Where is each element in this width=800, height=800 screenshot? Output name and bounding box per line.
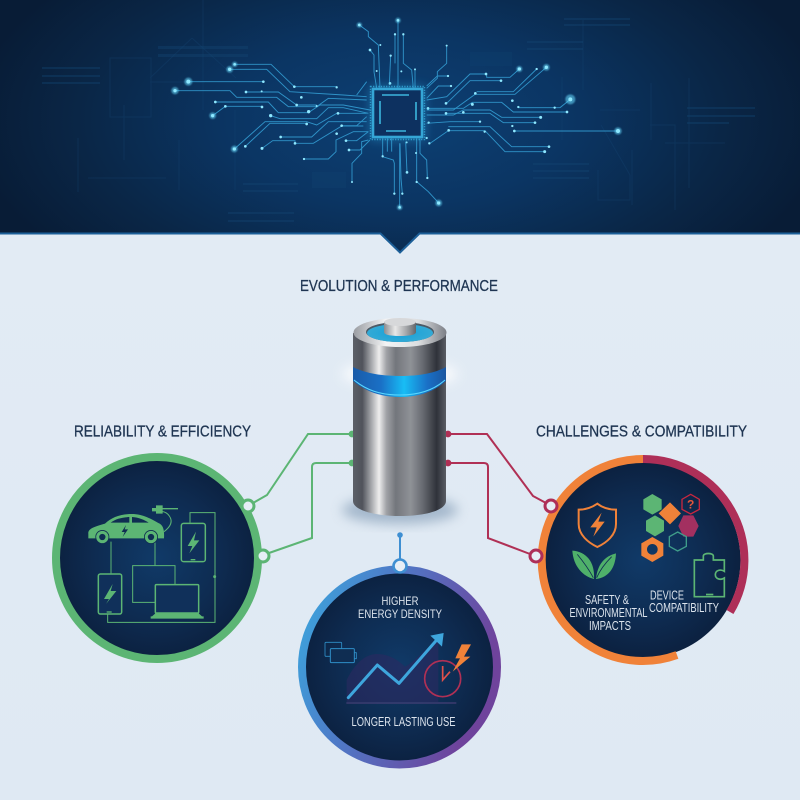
laptop (155, 585, 199, 613)
label: higher energy density: ENERGY DENSITY (358, 607, 442, 621)
car (88, 514, 164, 538)
top connector stem and node (394, 532, 406, 572)
header panel: circuit banner (0, 0, 800, 253)
orange ring arc (542, 459, 677, 661)
circuit traces (171, 18, 622, 210)
label: higher energy density: HIGHER (382, 594, 419, 608)
battery top cap (354, 318, 446, 347)
upper phone (181, 523, 205, 562)
label: device compatibility: DEVICE (650, 588, 684, 602)
glowing blue band (353, 367, 446, 397)
label: longer lasting use: LONGER LASTING USE (352, 715, 456, 729)
heading: challenges and compatibility: CHALLENGES & COMPATIBILITY (536, 424, 747, 440)
label: safety and environmental impacts: SAFETY & (585, 593, 629, 607)
battery (342, 318, 458, 524)
chart: rising energy arrow with clock (325, 633, 471, 703)
label: device compatibility: COMPATIBILITY (649, 601, 719, 615)
plug (152, 505, 178, 514)
connector nodes (530, 500, 557, 562)
heading: reliability and efficiency: RELIABILITY & EFFICIENCY (74, 424, 251, 440)
crimson ring arc (643, 459, 744, 612)
red connector lines (446, 432, 546, 554)
panel: energy density circle (302, 532, 497, 764)
label: safety and environmental impacts: ENVIRONMENTAL (570, 606, 648, 620)
microchip (370, 86, 425, 140)
label: safety and environmental impacts: IMPACTS (589, 619, 631, 633)
green connector lines (253, 432, 354, 553)
label: safety and environmental impacts (570, 593, 648, 633)
panel: reliability circle (56, 457, 269, 659)
label: device compatibility (649, 588, 719, 615)
icons: car, phones and laptop (88, 505, 216, 622)
heading: evolution and performance: EVOLUTION & PERFORMANCE (300, 278, 498, 295)
small battery icons (325, 642, 356, 663)
connector nodes (242, 500, 269, 562)
icons: shield, leaf, hexagons, puzzle phone (572, 494, 724, 597)
lower phone (98, 574, 122, 614)
panel: challenges circle (530, 459, 744, 661)
icons: shield, leaf, hexagons, puzzle phone: ? (687, 498, 694, 512)
label: higher energy density (358, 594, 442, 621)
